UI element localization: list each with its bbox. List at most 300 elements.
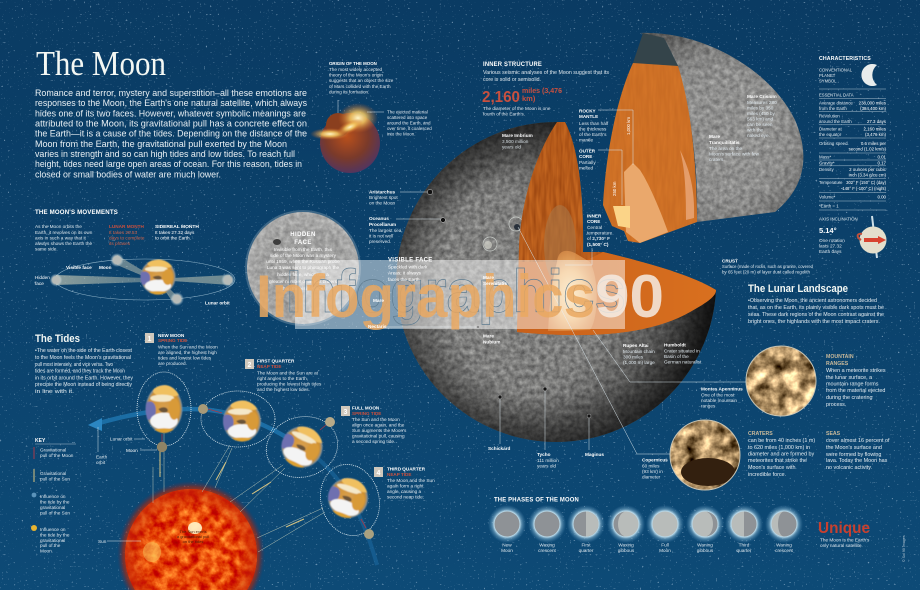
rocky mantle label (579, 108, 633, 165)
step 4 text: The Moon and the Sun (387, 478, 435, 483)
lunar month: days to complete (109, 236, 145, 240)
sun caption (177, 529, 209, 544)
key: influence of the Moon: gravitational (40, 538, 65, 543)
crust label: CRUST (722, 258, 738, 264)
lunar landscape text (748, 298, 884, 325)
phase: full moon (646, 505, 684, 553)
surface labels: Mare Tranquillitatis (709, 134, 759, 162)
characteristics panel: 0.01 (877, 154, 887, 160)
movements text: axis in such a way that it (35, 236, 87, 240)
key: influence of the Sun: pull of the Sun (40, 510, 70, 516)
seas text: cover almost 16 percent of (826, 438, 890, 444)
inner structure heading and text: core is solid or semisolid. (483, 77, 541, 83)
tides text: in line with it. (35, 389, 74, 395)
sun caption: on the tides (183, 539, 203, 544)
mountain ranges text: RANGES (826, 361, 849, 367)
intro paragraph: attributed to the Moon, its gravitational pull has a concrete effect on (35, 118, 307, 128)
crust label (722, 258, 813, 274)
characteristics panel: 0.17 (877, 160, 887, 166)
inner core label (565, 214, 613, 265)
heading: the Moon's movements: THE MOON'S MOVEMENTS (35, 209, 118, 216)
key: influence of the Sun (32, 493, 70, 516)
phase: waxing gibbous (607, 505, 645, 553)
origin of the moon text: during its formation. (329, 89, 369, 94)
Copernicus label with leader line: diameter (642, 474, 661, 480)
craters text: incredible force. (748, 472, 786, 478)
lunar landscape text: seas. These dark regions of the Moon contrast against the (748, 312, 884, 318)
moon interior: orange wall and floor of the cut (515, 120, 720, 340)
surface labels: Oceanus Procellarum: Oceanus (369, 216, 389, 221)
phase: waning gibbous: Waning (697, 542, 713, 548)
step 4 text: THIRD QUARTER (387, 466, 426, 472)
characteristics panel: (3,476 km) (865, 132, 887, 137)
step 2 text: right angles to the Earth, (257, 376, 308, 381)
Montes Apenninus label with leader line: One of the most (701, 392, 735, 398)
outer core label: OUTER (579, 148, 596, 154)
surface labels: Mare Tranquillitatis: Moon's surface with few (709, 152, 759, 156)
phase: new moon (488, 505, 526, 553)
phase: first quarter (567, 505, 605, 553)
surface labels: Maginus (585, 414, 604, 457)
surface labels: Oceanus Procellarum: it is not well (369, 234, 393, 238)
intro paragraph: varies in strength and so can high tides and low tides. To reach full (35, 149, 295, 159)
axis inclination: lasts 27.32 (819, 244, 842, 248)
tide diagram labels: Earth (96, 454, 108, 460)
surface labels: Rupes Altai (623, 343, 655, 365)
mountain ranges text: process. (826, 402, 846, 408)
surface labels: Mare Tranquillitatis: Tranquillitatis (709, 140, 740, 145)
mountain ranges text: during the cratering (826, 395, 872, 401)
hidden face description (266, 247, 340, 291)
step 1 text: are aligned, the highest high (158, 350, 217, 355)
icon: tilted rotating globe (858, 216, 886, 258)
surface labels: Tycho (537, 387, 559, 468)
step 3 text: Sun augments the Moon's (352, 428, 407, 433)
step 2 text: The Moon and the Sun are at (257, 370, 319, 376)
mare labels under the watermark: Serenitatis (483, 281, 507, 286)
Copernicus label with leader line (518, 227, 670, 480)
Montes Apenninus label with leader line: ranges (701, 404, 716, 408)
craters text: meteorites that strike the (748, 458, 807, 464)
surface labels: Humboldt: Basin of the (664, 354, 689, 359)
ejected material note: around the Earth, and (387, 120, 431, 126)
characteristics panel: 2,160 miles (864, 126, 887, 132)
hidden face moon: FACE (294, 240, 312, 246)
outer core label: melted (579, 166, 593, 170)
crust label: Surface (made of rocks, such as granite, covered (722, 264, 813, 269)
characteristics panel: Gravity* (819, 160, 835, 166)
surface labels: Mare Tranquillitatis: Mare (709, 134, 720, 139)
surface labels: Mare Crisium: Mare Crisium (747, 94, 777, 99)
hidden face description: Invisible from the Earth, this (274, 247, 333, 252)
surface labels: Mare Crisium: miles (450 by (747, 111, 776, 116)
movements text: As the Moon orbits the (35, 224, 82, 229)
mare labels under the watermark: Mare (373, 298, 384, 303)
tide diagram labels (96, 427, 157, 544)
sidereal month: SIDEREAL MONTH (155, 224, 199, 230)
orbit labels: Visible face (66, 265, 92, 270)
visible face label (388, 258, 433, 282)
intro paragraph: the Earth—it is a cause of the tides. Depending on the distance of the (35, 129, 307, 139)
key: gravitational pull of the Sun (34, 469, 70, 482)
visible face label: Areas; it always (388, 270, 421, 276)
hidden face description: side of the Moon was a mystery (270, 253, 337, 258)
tide stage 3: full moon diagram (259, 409, 345, 485)
ejected material note: scattered into space (387, 115, 428, 120)
diagram: Moon's orbit around Earth (50, 253, 235, 306)
surface labels: Tycho: years old (537, 464, 556, 468)
step 4 text: angle, causing a (387, 489, 422, 494)
tides text (35, 348, 133, 395)
tide diagram labels: orbit (96, 460, 106, 465)
surface labels: Humboldt: Humboldt (664, 342, 686, 348)
diameter figure: The diameter of the Moon is one (483, 106, 551, 111)
surface labels: Mare Crisium: naked eye. (747, 133, 770, 138)
intro paragraph (35, 88, 307, 179)
axis inclination (819, 216, 886, 258)
key: influence of the Moon: the tide by the (40, 532, 70, 538)
surface labels: Tycho: 111 million (537, 458, 559, 463)
surface labels: Rupes Altai: Rupes Altai (623, 343, 649, 348)
phase: third quarter (725, 505, 763, 553)
crater photo circle (669, 419, 741, 491)
lunar month (109, 224, 145, 246)
step 3 text: gravitational pull, causing (352, 434, 405, 438)
tide stage 4: third quarter diagram (313, 458, 387, 542)
key: gravitational pull of the Sun: Gravitational (40, 471, 66, 476)
key: influence of the Moon: Influence on (40, 527, 66, 532)
moon surface: grey cratered sphere (396, 122, 718, 444)
origin of the moon text: ORIGIN OF THE MOON (329, 61, 377, 66)
orbit labels: face (35, 281, 44, 286)
sun caption: a gravitational pull (177, 534, 209, 539)
key: influence of the Moon: Moon (40, 548, 52, 554)
sidereal month: It takes 27.32 days (155, 230, 195, 235)
intro paragraph: hides one of its two faces. However, whatever symbolic meanings are (35, 108, 306, 118)
key: gravitational pull of the Moon: pull of the Moon (40, 453, 74, 458)
surface labels: Mare Crisium: with the (747, 128, 764, 132)
characteristics panel: Mass* (819, 154, 831, 160)
axis inclination: One rotation (819, 238, 845, 243)
key: gravitational pull of the Moon (34, 447, 74, 459)
inner structure heading and text: INNER STRUCTURE (483, 61, 542, 68)
intro paragraph: responses to the Moon, the Earth's one natural satellite, which always (35, 98, 307, 108)
surface labels: Humboldt (664, 342, 702, 364)
phase: first quarter: quarter (579, 548, 594, 553)
inner core label: CORE (587, 219, 600, 224)
inner core label: (1,500° C) (587, 242, 609, 247)
surface labels: Mare Nubium (368, 325, 500, 344)
inner core label: Central (587, 225, 602, 230)
surface labels: Mare Imbrium: Mare Imbrium (502, 133, 533, 138)
surface labels: Humboldt: Crater situated in (664, 348, 700, 354)
key: KEY (35, 438, 46, 444)
step 3 text: The Sun and the Moon (352, 417, 400, 422)
characteristics panel: 0.6 miles per (861, 141, 887, 146)
rocky mantle label: the thickness (579, 126, 607, 132)
characteristics panel: Orbiting speed (819, 141, 848, 146)
inner core label: INNER (587, 214, 602, 218)
key: influence of the Sun: gravitational (40, 505, 65, 510)
orbit labels: Lunar orbit (205, 300, 230, 306)
tides text: to the Moon feels the Moon's gravitational (35, 355, 131, 361)
characteristics panel: the equator (819, 132, 842, 137)
sun rays to the four earths (153, 433, 325, 552)
characteristics panel: Average distance (819, 100, 853, 106)
step 1 text (145, 333, 218, 366)
characteristics panel: Revolution (819, 114, 840, 118)
step 2 text: 2 (248, 362, 252, 369)
surface labels: Tycho: Tycho (537, 452, 551, 457)
unique callout: Unique (818, 520, 870, 537)
Copernicus label with leader line: Copernicus (642, 458, 668, 462)
surface labels: Mare Crisium: miles by 350 (747, 106, 774, 110)
characteristics panel: Temperature (819, 180, 843, 185)
rocky mantle label: mantle (579, 138, 593, 142)
surface labels: Mare Crisium: 563 km) and (747, 116, 773, 122)
title: The Moon (36, 44, 166, 83)
unique callout: The Moon is the Earth's (820, 538, 870, 542)
axis inclination: Earth days (819, 249, 842, 254)
craters text: CRATERS (748, 431, 773, 437)
visible face label: faces the Earth (388, 277, 420, 282)
icon: crescent moon symbol (861, 64, 877, 86)
surface labels: Mare Tranquillitatis: craters. (709, 157, 725, 162)
cut-out wedge: raised upper section of the Moon (600, 30, 810, 245)
mountain ranges text: When a meteorite strikes (826, 368, 886, 374)
movements text (35, 224, 93, 252)
step 1 text: SPRING TIDE (158, 338, 187, 343)
origin of the moon text (329, 61, 394, 94)
hidden face description: hidden face, which has a (277, 272, 329, 277)
phase: full moon: Moon (659, 548, 671, 553)
mare labels under the watermark (368, 275, 507, 329)
tide diagram labels: Sun (98, 539, 107, 544)
origin of the moon text: theory of the Moon's origin (329, 73, 383, 78)
characteristics panel: 238,000 miles (859, 100, 887, 106)
step 2 text: producing the lowest high tides (257, 382, 322, 386)
characteristics panel: inch (3.34 g/cu cm) (849, 172, 887, 178)
diameter figure (482, 86, 562, 116)
visible face label: VISIBLE FACE (388, 258, 433, 264)
characteristics panel: second (1.02 km/s) (849, 146, 887, 152)
surface labels: Oceanus Procellarum (369, 216, 445, 244)
phase: third quarter: quarter (737, 548, 752, 553)
hidden face moon (245, 210, 361, 326)
step 3 text: 3 (344, 409, 348, 416)
heading: the tides: The Tides (35, 333, 80, 345)
phase: third quarter: Third (739, 542, 750, 548)
key: influence of the Moon: pull of the (40, 543, 61, 548)
step 2 text: and the highest low tides. (257, 387, 310, 392)
orbit labels: Hidden (35, 275, 50, 280)
phase: waning crescent (765, 505, 803, 553)
phase: waxing gibbous: Waxing (618, 542, 634, 548)
phase: new moon: New (502, 542, 512, 548)
surface labels: Aristarchus (369, 189, 433, 206)
characteristics panel: (384,400 km) (860, 106, 887, 111)
phase: waning gibbous: gibbous (697, 548, 714, 553)
mountain ranges text: MOUNTAIN (826, 354, 854, 360)
diameter figure: 2,160 (482, 89, 520, 106)
Copernicus label with leader line: 60 miles (642, 464, 660, 468)
diameter figure: fourth of the Earth's. (483, 112, 525, 116)
surface labels: Mare Imbrium: 3,500 million (502, 139, 529, 144)
wedge outer surface (633, 30, 810, 225)
tide stage 1: new moon diagram (137, 372, 191, 452)
sidereal month (155, 224, 199, 240)
step 3 text: a second spring tide. (352, 439, 395, 444)
unique callout: only natural satellite. (820, 543, 863, 548)
step 3 text: align once again, and the (352, 422, 405, 428)
sun (117, 481, 265, 590)
step 1 text: are produced. (158, 361, 187, 366)
tides text: in its orbit around the Earth. However, they (35, 375, 133, 381)
mountain ranges text (826, 354, 886, 408)
tides text: pull most intensely, and vice versa. Two (35, 362, 113, 368)
key: influence of the Sun: Influence on (40, 494, 66, 499)
surface labels: Mare Crisium (747, 94, 777, 138)
ejected material note: into the Moon. (387, 132, 416, 136)
origin of the moon text: of Mars collided with the Earth (329, 84, 391, 89)
seas text: SEAS (826, 431, 841, 437)
phase: waning crescent: Waning (776, 542, 792, 548)
surface labels: Mare Crisium: Measures 280 (747, 100, 777, 105)
phase: waxing crescent: Waxing (539, 542, 555, 548)
characteristics panel: 2 ounces per cubic (849, 167, 887, 172)
seas text: were formed by flowing (825, 452, 881, 458)
step 4 text (374, 466, 435, 500)
characteristics panel: Diameter at (819, 126, 842, 132)
craters text: can be from 40 inches (1 m) (748, 438, 815, 444)
heading: the lunar landscape: The Lunar Landscape (748, 283, 848, 295)
step 4 text: NEAP TIDE (387, 472, 411, 477)
tide diagram labels: Moon (126, 448, 138, 453)
surface labels: Schickard: Schickard (488, 446, 511, 451)
crust label: by 65 feet (20 m) of layer dust called regolith (722, 270, 810, 274)
hidden face label: HIDDEN (290, 232, 316, 238)
Montes Apenninus label with leader line (593, 330, 746, 408)
key (31, 438, 76, 554)
ejected material note: over time, it coalesced (387, 126, 432, 131)
inner structure heading and text: Various seismic analyses of the Moon suggest that its (483, 70, 609, 76)
orbit labels: Moon (99, 265, 112, 270)
inner structure heading and text (483, 61, 609, 83)
intro paragraph: Moon from the Earth, the gravitational pull exerted by the Moon (35, 139, 287, 149)
intro paragraph: height, tides need large open areas of ocean. For this reason, tides in (35, 159, 302, 169)
key: gravitational pull of the Moon: Gravitational (40, 448, 66, 452)
characteristics panel: CONVENTIONAL (819, 68, 853, 72)
heading: phases of the moon: THE PHASES OF THE MOON (494, 496, 579, 504)
inner core label: of 2,730° F (587, 236, 610, 241)
Montes Apenninus label with leader line: Montes Apenninus (701, 386, 743, 392)
characteristics panel: Density (819, 167, 834, 172)
craters text (748, 431, 815, 478)
surface labels: Mare Crisium: can be seen (747, 122, 773, 127)
outer core label: 250 km (612, 181, 617, 196)
watermark: Infographics90: Infographics (286, 258, 626, 325)
sun caption: The Sun exerts (179, 529, 207, 534)
origin of the moon text: suggests that an object the size (329, 78, 394, 83)
step 4 text: 4 (377, 470, 381, 477)
surface labels: Oceanus Procellarum: preserved. (369, 239, 391, 244)
outer core label: Partially (579, 160, 596, 165)
ejected material note: The ejected material (387, 110, 428, 114)
characteristics panel: around the Earth (819, 119, 852, 124)
surface labels: Oceanus Procellarum: The largest sea, (369, 228, 403, 233)
mountain ranges text: the lunar surface, a (826, 375, 872, 381)
lunar landscape text: bright ones, the highlands with the most impact craters. (748, 319, 880, 325)
step 1 text: 1 (148, 336, 152, 343)
seas text: the Moon's surface and (826, 445, 882, 451)
earth orbit arc with arrow (88, 409, 377, 565)
craters text: to 620 miles (1,000 km) in (748, 445, 810, 451)
characteristics panel (819, 56, 887, 210)
visible face label: Speckled with dark (388, 264, 428, 270)
surface labels: Aristarchus: Aristarchus (369, 190, 395, 194)
surface labels: Rupes Altai: (1,000 m) large (623, 360, 655, 365)
characteristics panel: SYMBOL (819, 78, 837, 84)
surface labels: Maginus: Maginus (585, 452, 604, 457)
Copernicus label with leader line: (93 km) in (642, 469, 663, 474)
rocky mantle label: ROCKY (579, 108, 596, 114)
intro paragraph: Romance and terror, mystery and superstition–all these emotions are (35, 88, 307, 98)
surface labels: Mare Tranquillitatis: The area on the (709, 146, 742, 151)
surface labels: Humboldt: German naturalist (664, 360, 702, 364)
characteristics panel: PLANET (819, 73, 836, 78)
phases of the moon row (488, 505, 803, 553)
characteristics panel: *Earth = 1 (819, 204, 839, 208)
lunar landscape text: •Observing the Moon, the ancient astronomers decided (748, 298, 877, 304)
step 3 text: SPRING TIDE (352, 411, 381, 416)
rocky mantle label: Less than half (579, 121, 609, 126)
ejected material note (387, 110, 432, 136)
origin of the moon text: The most widely accepted (329, 67, 383, 72)
outer core label (579, 148, 622, 205)
lunar month: its phases (109, 241, 131, 246)
intro paragraph: closed or small bodies of water are much lower. (35, 169, 221, 179)
lunar landscape text: that, as on the Earth, its plainly visible dark spots must be (748, 305, 884, 311)
seas text: lava. Today the Moon has (826, 458, 888, 464)
step 1 text: tides and lowest low tides (158, 356, 212, 360)
characteristics panel: Volume* (819, 194, 836, 200)
orbit labels (35, 265, 230, 306)
tide stage 2: first quarter diagram (198, 391, 275, 447)
watermark: Infographics90: 90 (595, 263, 664, 330)
step 1 text: When the Sun and the Moon (158, 344, 218, 350)
surface labels: Aristarchus: Brightest spot (369, 195, 398, 200)
step 4 text: second neap tide. (387, 494, 424, 500)
tides text: •The water on the side of the Earth closest (35, 348, 132, 354)
characteristics panel: 27.3 days (867, 119, 887, 124)
surface labels: Rupes Altai: 300 miles (623, 354, 644, 360)
rocky mantle label: of the Earth's (579, 132, 607, 137)
lunar month: It takes 29.53 (109, 230, 138, 235)
step 2 text: FIRST QUARTER (257, 358, 295, 364)
characteristics panel: CHARACTERISTICS (819, 56, 871, 62)
mare labels under the watermark: Mare (483, 275, 494, 280)
main moon: cutaway sphere (396, 120, 720, 444)
rocky mantle label: 1,000 km (626, 117, 631, 135)
hidden face description: than the visible face. (282, 286, 324, 291)
phase: waxing gibbous: gibbous (618, 548, 635, 553)
surface labels: Mare Nubium: Mare (483, 334, 494, 338)
craters text: Moon's surface with (748, 465, 795, 471)
phase: first quarter: First (581, 542, 591, 548)
surface labels: Rupes Altai: Mountain chain (623, 349, 655, 354)
diameter figure: miles (3,476 (522, 86, 562, 95)
phase: waning crescent: crescent (775, 548, 794, 553)
